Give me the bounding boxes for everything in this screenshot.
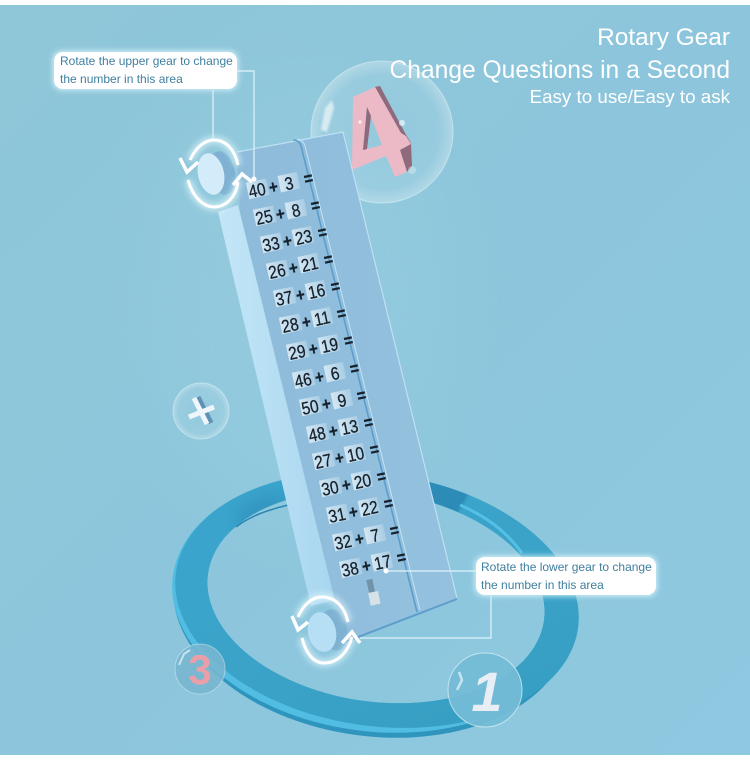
row 30 + 20: 20: [352, 470, 373, 493]
inner lip: [460, 505, 522, 553]
row 40 + 3: +: [267, 176, 280, 198]
row 28 + 11: +: [300, 311, 313, 333]
row 37 + 16: =: [329, 276, 342, 297]
bubble with number 1: 1: [471, 660, 503, 723]
row 27 + 10: 10: [345, 443, 366, 466]
upper gear with rotation arrows: [180, 140, 252, 207]
row 30 + 20: =: [375, 466, 388, 487]
row 29 + 19: 19: [319, 334, 340, 357]
row 30 + 20: +: [340, 474, 353, 496]
title block: Rotary Gear: [597, 24, 730, 51]
row 50 + 9: +: [320, 393, 333, 415]
row 26 + 21: =: [322, 249, 335, 270]
row 29 + 19: =: [342, 330, 355, 351]
row 30 + 20: 30: [320, 477, 341, 500]
row 26 + 21: +: [287, 257, 300, 279]
row 32 + 7: 7: [369, 525, 381, 547]
bubble with number 3: 3: [188, 646, 212, 693]
row 31 + 22: +: [347, 501, 360, 523]
numeral 4: [352, 86, 412, 177]
row 28 + 11: 11: [312, 307, 332, 330]
row 48 + 13: 48: [307, 423, 328, 446]
row 37 + 16: +: [294, 284, 307, 306]
bubble with plus sign: [173, 383, 229, 439]
callout upper gear: the number in this area: [60, 72, 183, 86]
row 25 + 8: [253, 195, 322, 229]
row 37 + 16: 37: [274, 287, 295, 310]
row 26 + 21: [266, 249, 335, 283]
row 27 + 10: +: [333, 447, 346, 469]
row 33 + 23: =: [316, 222, 329, 243]
row 33 + 23: [260, 222, 329, 256]
connector lines lower: [360, 568, 491, 638]
row 46 + 6: =: [348, 358, 361, 379]
row 32 + 7: +: [353, 528, 366, 550]
row 33 + 23: +: [281, 230, 294, 252]
row 31 + 22: 22: [359, 497, 380, 520]
row 32 + 7: [332, 520, 401, 554]
row 50 + 9: [299, 385, 368, 419]
bubble with number 4: [311, 61, 453, 203]
row 25 + 8: 25: [254, 206, 275, 229]
callout lower gear: the number in this area: [481, 578, 604, 592]
row 40 + 3: 40: [247, 179, 268, 202]
row 28 + 11: =: [335, 303, 348, 324]
row 40 + 3: =: [302, 168, 315, 189]
row 37 + 16: 16: [306, 280, 327, 303]
lower gear with rotation arrows: [292, 597, 360, 663]
callout lower gear: Rotate the lower gear to change: [481, 560, 652, 574]
row 33 + 23: 33: [261, 233, 282, 256]
row 26 + 21: 26: [267, 260, 288, 283]
connector lines upper: [213, 71, 256, 182]
row 25 + 8: +: [274, 203, 287, 225]
equation rows: [246, 168, 408, 581]
title block: Change Questions in a Second: [390, 57, 730, 84]
row 28 + 11: [279, 303, 348, 337]
row 50 + 9: =: [355, 385, 368, 406]
row 33 + 23: 23: [293, 226, 314, 249]
title block: Easy to use/Easy to ask: [530, 86, 731, 107]
callout lower gear: [475, 556, 657, 596]
callout upper gear: Rotate the upper gear to change: [60, 54, 233, 68]
slider switch: [365, 578, 381, 606]
row 38 + 17: 17: [372, 551, 393, 574]
row 38 + 17: +: [360, 555, 373, 577]
row 48 + 13: [306, 412, 375, 446]
callout upper gear: [53, 51, 238, 90]
row 48 + 13: =: [362, 412, 375, 433]
row 50 + 9: 50: [300, 396, 321, 419]
row 27 + 10: 27: [313, 450, 334, 473]
ring platform: [172, 476, 579, 738]
row 29 + 19: [286, 330, 355, 364]
row 28 + 11: 28: [280, 314, 301, 337]
row 38 + 17: [339, 547, 408, 581]
row 38 + 17: =: [395, 547, 408, 568]
row 48 + 13: +: [327, 420, 340, 442]
row 38 + 17: 38: [340, 558, 361, 581]
row 46 + 6: +: [313, 366, 326, 388]
row 40 + 3: [246, 168, 315, 202]
bubble with number 3: [175, 644, 225, 694]
row 48 + 13: 13: [339, 416, 360, 439]
row 37 + 16: [273, 276, 342, 310]
row 25 + 8: 8: [290, 200, 302, 222]
device body: [237, 132, 457, 642]
row 27 + 10: [312, 439, 381, 473]
row 30 + 20: [319, 466, 388, 500]
row 46 + 6: 6: [329, 363, 341, 385]
device side face: [218, 205, 335, 606]
row 31 + 22: =: [382, 493, 395, 514]
row 31 + 22: 31: [327, 504, 348, 527]
title block: [390, 24, 731, 107]
row 29 + 19: +: [307, 338, 320, 360]
row 46 + 6: 46: [293, 369, 314, 392]
row 40 + 3: 3: [283, 173, 295, 195]
row 29 + 19: 29: [287, 341, 308, 364]
row 26 + 21: 21: [299, 253, 320, 276]
row 27 + 10: =: [368, 439, 381, 460]
row 31 + 22: [326, 493, 395, 527]
bubble with number 1: [448, 653, 522, 727]
row 46 + 6: [292, 358, 361, 392]
row 32 + 7: =: [388, 520, 401, 541]
row 25 + 8: =: [309, 195, 322, 216]
row 32 + 7: 32: [333, 531, 354, 554]
row 50 + 9: 9: [336, 390, 348, 412]
